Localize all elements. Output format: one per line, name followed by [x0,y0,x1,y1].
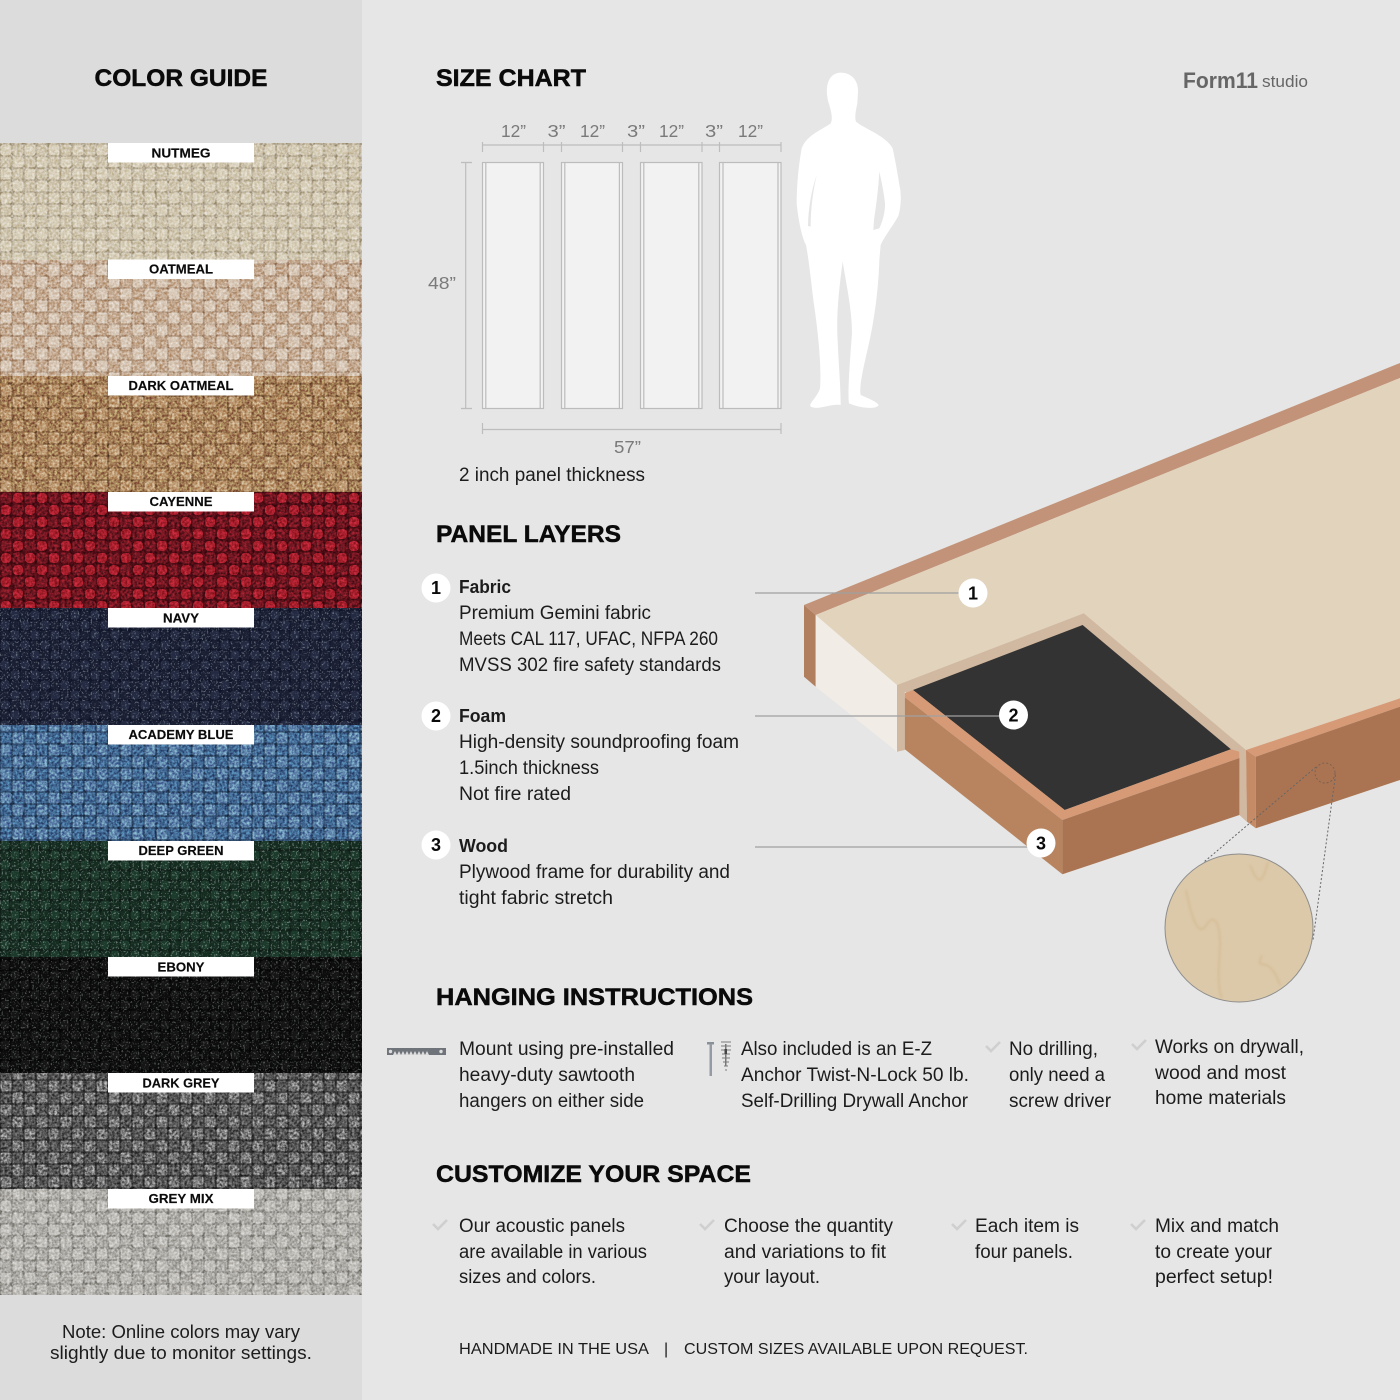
swatch: ebony [0,957,362,1073]
text: each item: four panels. [975,1242,1073,1263]
logo: Form11 studio [1183,68,1308,93]
right section wood [1246,698,1400,828]
icon: sawtooth hanger [387,1048,446,1055]
text: drywall anchor: Also included is an E-Z [741,1039,932,1060]
swatch: deep green: DEEP GREEN [138,844,224,858]
text: quantity: your layout. [724,1267,820,1288]
height dimension [428,162,472,408]
text: mix and match: Mix and match [1155,1216,1279,1237]
fabric channel [897,613,1247,822]
text: sizes and colors [459,1216,647,1288]
layer 1: fabric: Premium Gemini fabric [459,603,651,624]
check 3 [952,1220,966,1229]
text: mix and match: perfect setup! [1155,1267,1273,1288]
note text: Note: Online colors may vary [62,1321,301,1342]
layer 1: fabric: Meets CAL 117, UFAC, NFPA 260 [459,629,718,650]
swatch: oatmeal [0,260,362,376]
text: sawtooth hangers [459,1039,674,1112]
layer 1: fabric [422,574,721,676]
layer 1: fabric: 1 [431,578,441,598]
layer 2: foam [422,702,739,805]
text: drywall anchor [741,1039,969,1112]
marker 3: 3 [1036,834,1046,854]
width labels: 3” [705,121,723,141]
footer line: CUSTOM SIZES AVAILABLE UPON REQUEST. [684,1341,1028,1358]
heading: size chart: SIZE CHART [436,65,586,92]
footer line [459,1341,1028,1358]
layer 2: foam: Not fire rated [459,784,571,805]
swatch: dark oatmeal: DARK OATMEAL [128,379,234,393]
width labels: 12” [580,121,605,141]
swatch: dark grey [0,1073,362,1189]
check 1 [433,1220,447,1229]
layer 1: fabric: MVSS 302 fire safety standards [459,655,721,676]
layer 3: wood: Plywood frame for durability and [459,862,730,883]
width dimension line [482,142,781,152]
chart: size chart diagram [428,121,781,457]
text: sawtooth hangers: Mount using pre-installed [459,1039,674,1060]
text: works on drywall [1154,1037,1304,1109]
icon: screw and anchor [707,1042,731,1076]
check 2 [700,1220,714,1229]
text: no drilling [1009,1039,1112,1112]
text: quantity [724,1216,893,1288]
text: mix and match [1155,1216,1279,1288]
swatch: ebony: EBONY [158,960,205,974]
width labels: 12” [501,121,526,141]
note text [50,1321,312,1363]
text: mix and match: to create your [1155,1242,1273,1263]
width labels: 3” [548,121,566,141]
text: works on drywall: home materials [1155,1088,1286,1109]
check: works on drywall [1132,1040,1146,1049]
total width dimension [482,423,781,457]
layer 3: wood: 3 [431,835,441,855]
text: each item: Each item is [975,1216,1079,1237]
fabric top surface [816,378,1400,750]
text: sizes and colors: are available in various [459,1242,647,1263]
footer line: HANDMADE IN THE USA [459,1341,649,1358]
layer 2: foam: High-density soundproofing foam [459,732,739,753]
swatch: navy [0,608,362,725]
block: hanging instructions [387,1037,1304,1112]
heading: color guide: COLOR GUIDE [94,65,268,92]
width labels: 12” [659,121,684,141]
text: drywall anchor: Anchor Twist-N-Lock 50 lb. [741,1065,969,1086]
block: customize your space [433,1216,1279,1288]
text: quantity: and variations to fit [724,1242,887,1263]
text: works on drywall: wood and most [1154,1063,1287,1084]
swatch: cayenne [0,492,362,608]
panel: color guide [0,0,362,1400]
marker 3 [1026,828,1056,858]
swatch: nutmeg: NUTMEG [152,146,210,160]
height dimension: 48” [428,273,456,293]
layer 2: foam: 1.5inch thickness [459,758,599,779]
marker 2 [999,700,1028,730]
text: quantity: Choose the quantity [724,1216,893,1237]
swatch: grey mix [0,1189,362,1295]
swatch: dark oatmeal [0,376,362,492]
left end wood [804,605,816,687]
swatch: academy blue [0,725,362,841]
swatch: navy: NAVY [163,612,200,626]
swatch: academy blue: ACADEMY BLUE [128,728,234,742]
text: no drilling: No drilling, [1009,1039,1098,1060]
width labels: 12” [738,121,763,141]
layer 3: wood: Wood [459,836,508,856]
layer 3: wood: tight fabric stretch [459,888,613,909]
text: no drilling: screw driver [1009,1091,1112,1112]
illustration: panel cutaway [804,363,1400,874]
text: sawtooth hangers: heavy-duty sawtooth [459,1065,635,1086]
list: panel layers [422,574,739,909]
text: works on drywall: Works on drywall, [1155,1037,1304,1058]
footer line: | [664,1341,668,1358]
layer 3: wood [422,830,730,909]
note text: slightly due to monitor settings. [50,1342,312,1363]
swatch: dark grey: DARK GREY [142,1076,220,1090]
swatch: nutmeg [0,143,362,260]
heading: customize your space: CUSTOMIZE YOUR SPACE [436,1161,751,1188]
text: sawtooth hangers: hangers on either side [459,1091,644,1112]
text: sizes and colors: sizes and colors. [459,1267,596,1288]
heading: hanging instructions: HANGING INSTRUCTIONS [436,984,753,1011]
layer 2: foam: 2 [431,706,441,726]
swatch: grey mix: GREY MIX [148,1192,214,1206]
leader lines and markers [755,578,1056,858]
wood frame top edge [905,690,1239,820]
text: sizes and colors: Our acoustic panels [459,1216,625,1237]
wood frame left face [905,697,1062,874]
marker 2: 2 [1008,706,1019,726]
text: panel thickness: 2 inch panel thickness [459,465,645,486]
logo: Form11 studio: Form11 [1183,68,1258,93]
swatch: oatmeal: OATMEAL [149,262,213,276]
text: no drilling: only need a [1009,1065,1105,1086]
check: no drilling [986,1042,1000,1051]
swatch: cayenne: CAYENNE [150,495,212,509]
width labels: 3” [627,121,645,141]
text: each item [975,1216,1079,1263]
logo: Form11 studio: studio [1262,72,1308,91]
panel outlines [482,162,781,408]
callout: wood detail [1165,763,1336,1002]
width labels [501,121,763,141]
fabric side [816,615,897,752]
heading: panel layers: PANEL LAYERS [436,521,621,548]
marker 1: 1 [968,584,978,604]
wood frame right face [1062,758,1239,874]
check 4 [1131,1220,1145,1229]
swatch: deep green [0,841,362,957]
top wood strip [804,363,1400,615]
layer 2: foam: Foam [459,706,506,726]
marker 1 [958,578,988,608]
icon: human silhouette [797,73,901,408]
layer 1: fabric: Fabric [459,577,511,597]
foam layer [913,625,1231,810]
total width dimension: 57” [614,437,641,457]
text: drywall anchor: Self-Drilling Drywall Anchor [741,1091,969,1112]
